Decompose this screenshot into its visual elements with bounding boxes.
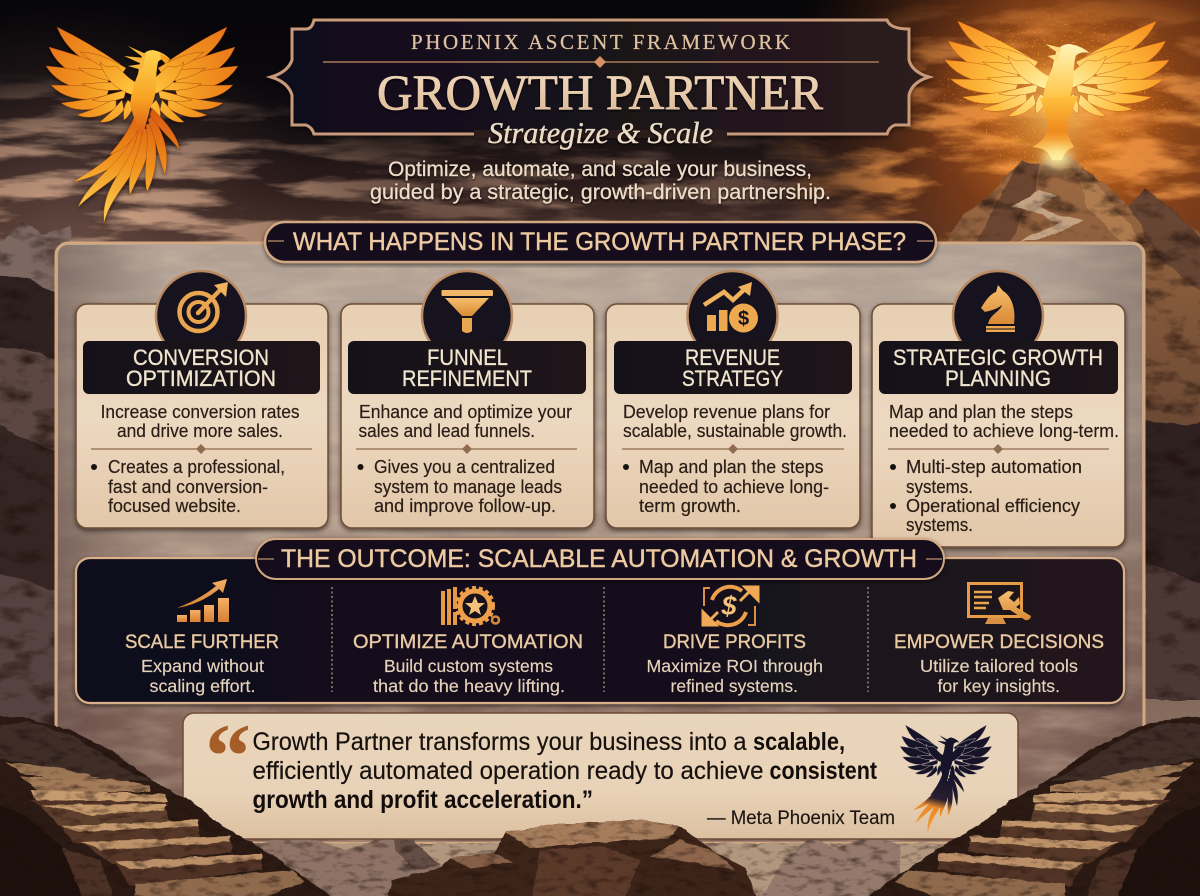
- outcome: optimize automation: Build custom systems: [384, 656, 553, 676]
- outcome: drive profits: [646, 587, 823, 696]
- outcome: optimize automation: [353, 587, 583, 696]
- outcome: scale further: SCALE FURTHER: [125, 631, 279, 653]
- quote text: efficiently automated operation ready to achieve: [252, 757, 764, 785]
- quote text: [252, 728, 878, 814]
- phoenix left: [46, 27, 238, 223]
- bullet list: needed to achieve long-: [639, 477, 829, 497]
- outcome: scale further: Expand without: [141, 656, 264, 676]
- icon: revenue chart and coin: $: [738, 308, 749, 330]
- bullet list: Multi-step automation: [906, 457, 1082, 477]
- bullet list: systems.: [906, 477, 973, 497]
- bullet list: fast and conversion-: [108, 477, 268, 497]
- banner divider: [323, 56, 879, 68]
- phoenix right with fire: [945, 21, 1169, 167]
- bullet list: Creates a professional,: [108, 457, 285, 477]
- main stone panel: [56, 243, 1144, 843]
- attribution: — Meta Phoenix Team: [707, 807, 895, 829]
- title bar: STRATEGIC GROWTH: [893, 345, 1103, 370]
- icon: monitor and wrench: [968, 584, 1031, 624]
- description: Map and plan the steps: [889, 401, 1073, 422]
- quote text: Growth Partner transforms your business into a: [252, 728, 747, 756]
- column dividers: [332, 587, 868, 692]
- divider: [622, 444, 844, 454]
- description: [889, 401, 1119, 441]
- outcome: optimize automation: that do the heavy lifting.: [373, 676, 565, 696]
- section heading: what happens: WHAT HAPPENS IN THE GROWTH PARTNER PHASE?: [293, 228, 906, 256]
- stone stairs left: [0, 716, 350, 896]
- quote text: consistent: [770, 757, 878, 785]
- outcome: drive profits: DRIVE PROFITS: [663, 631, 806, 653]
- bullet list: Map and plan the steps: [639, 457, 824, 477]
- section heading: what happens: [265, 222, 936, 262]
- outcome: scale further: scaling effort.: [150, 676, 256, 696]
- description: scalable, sustainable growth.: [623, 420, 847, 441]
- outcome: empower decisions: Utilize tailored tools: [920, 656, 1078, 676]
- bullet list: term growth.: [639, 496, 741, 516]
- outcome: optimize automation: OPTIMIZE AUTOMATION: [353, 631, 583, 653]
- tagline: guided by a strategic, growth-driven partnership.: [370, 181, 831, 204]
- stone stairs right: [850, 716, 1200, 896]
- title bar: [614, 341, 852, 394]
- outcome: empower decisions: for key insights.: [938, 676, 1060, 696]
- outcome: scale further: [125, 579, 279, 696]
- quote text: growth and profit acceleration.”: [252, 786, 593, 814]
- card: conversion optimization: [76, 271, 328, 528]
- banner plaque: [271, 20, 929, 134]
- description: needed to achieve long-term.: [889, 420, 1119, 441]
- bullet list: and improve follow-up.: [374, 496, 556, 516]
- icon: quotation mark: “: [205, 705, 251, 807]
- description: sales and lead funnels.: [358, 420, 535, 441]
- description: [101, 401, 300, 441]
- bullet list: [358, 457, 562, 516]
- mountains on the sides: [0, 150, 1200, 730]
- tagline: [370, 158, 831, 204]
- title bar: [879, 341, 1118, 394]
- eyebrow text: PHOENIX ASCENT FRAMEWORK: [411, 30, 790, 54]
- description: [358, 401, 572, 441]
- banner subtitle gap: [474, 130, 727, 138]
- icon: dollar with circular arrows: [703, 587, 758, 625]
- section heading: the outcome: THE OUTCOME: SCALABLE AUTOMATION & GROWTH: [281, 545, 917, 573]
- description: Develop revenue plans for: [623, 401, 830, 422]
- bullet list: Operational efficiency: [906, 496, 1080, 516]
- title bar: OPTIMIZATION: [126, 366, 276, 391]
- card: funnel refinement: [341, 271, 594, 528]
- outcome panel: [76, 558, 1124, 703]
- tagline: Optimize, automate, and scale your business,: [388, 158, 812, 181]
- divider: [356, 444, 577, 454]
- main title: GROWTH PARTNER: [377, 64, 824, 120]
- bullet list: systems.: [906, 515, 973, 535]
- outcome: drive profits: Maximize ROI through: [646, 656, 823, 676]
- description: [623, 401, 847, 441]
- foreground rocks: [386, 820, 762, 896]
- outcome: empower decisions: EMPOWER DECISIONS: [894, 631, 1104, 653]
- icon: target with arrow: [156, 271, 246, 361]
- quote panel: [183, 705, 1018, 839]
- bullet list: Gives you a centralized: [374, 457, 555, 477]
- bullet list: system to manage leads: [374, 477, 562, 497]
- quote text: scalable,: [753, 728, 845, 756]
- icon: dollar with circular arrows: $: [720, 591, 737, 621]
- bullet list: [623, 457, 829, 516]
- bullet list: [890, 457, 1082, 535]
- subtitle: Strategize & Scale: [488, 115, 713, 150]
- title bar: FUNNEL: [427, 345, 508, 370]
- description: Increase conversion rates: [101, 401, 300, 422]
- title bar: [83, 341, 320, 394]
- divider: [888, 444, 1109, 454]
- icon: rising bars: [177, 579, 229, 622]
- section heading: the outcome: [256, 539, 944, 579]
- divider: [91, 444, 312, 454]
- lower landscape: [160, 829, 1040, 896]
- icon: revenue chart and coin: [688, 271, 778, 361]
- card: revenue strategy: [606, 271, 860, 528]
- icon: chess knight: [953, 271, 1043, 361]
- title bar: CONVERSION: [133, 345, 269, 370]
- icon: gear with star: [441, 587, 499, 625]
- title bar: STRATEGY: [682, 366, 783, 391]
- icon: funnel: [422, 271, 512, 361]
- outcome: empower decisions: [894, 584, 1104, 696]
- title bar: PLANNING: [945, 366, 1051, 391]
- title banner: [271, 20, 929, 150]
- title bar: REFINEMENT: [402, 366, 532, 391]
- description: Enhance and optimize your: [359, 401, 572, 422]
- bullet list: [91, 457, 285, 516]
- description: and drive more sales.: [117, 420, 283, 441]
- outcome: drive profits: refined systems.: [670, 676, 798, 696]
- logo: small dark phoenix: [900, 725, 992, 833]
- bullet list: focused website.: [108, 496, 241, 516]
- card: strategic growth planning: [872, 271, 1125, 547]
- title bar: REVENUE: [685, 345, 780, 370]
- title bar: [348, 341, 586, 394]
